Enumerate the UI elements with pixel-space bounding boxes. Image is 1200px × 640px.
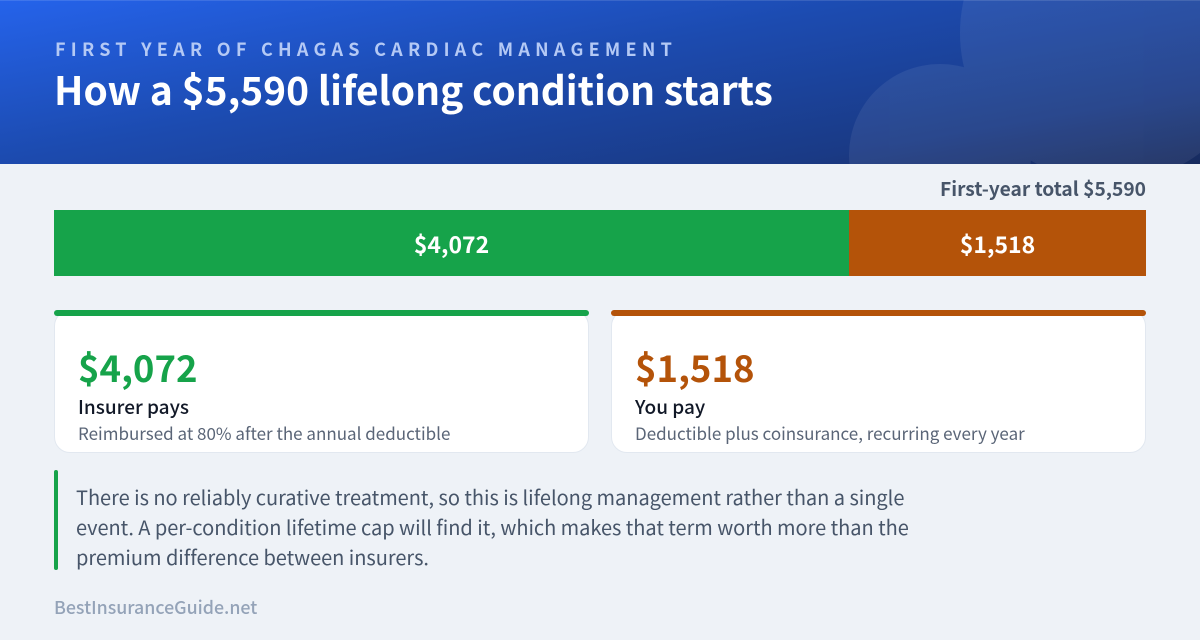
stacked bar (54, 210, 1146, 276)
description: Reimbursed at 80% after the annual deductible (78, 420, 450, 445)
callout text: There is no reliably curative treatment, so this is lifelong management rather than a single (76, 482, 904, 511)
callout text: premium difference between insurers. (76, 542, 429, 571)
panel: insurer pays (54, 310, 589, 453)
segment: you: $1,518 (960, 226, 1035, 260)
amount: $1,518 (635, 340, 755, 393)
title: How a $5,590 lifelong condition starts (54, 61, 773, 117)
eyebrow: FIRST YEAR OF CHAGAS CARDIAC MANAGEMENT (55, 36, 677, 62)
label: Insurer pays (78, 393, 189, 420)
segment: insurer: $4,072 (414, 226, 489, 260)
header banner (0, 0, 1200, 164)
callout accent (54, 470, 58, 570)
description: Deductible plus coinsurance, recurring every year (635, 420, 1025, 445)
footer brand: BestInsuranceGuide.net (54, 594, 257, 620)
segment: insurer (54, 210, 849, 276)
callout text: event. A per-condition lifetime cap will find it, which makes that term worth more than the (76, 512, 909, 541)
label: You pay (635, 393, 705, 420)
decorative circles (849, 0, 1200, 164)
accent bar (611, 310, 1146, 316)
amount: $4,072 (78, 340, 198, 393)
callout text (76, 482, 909, 571)
panel: you pay (611, 310, 1146, 453)
segment: you (849, 210, 1146, 276)
total label: First-year total $5,590 (940, 174, 1146, 202)
accent bar (54, 310, 589, 316)
